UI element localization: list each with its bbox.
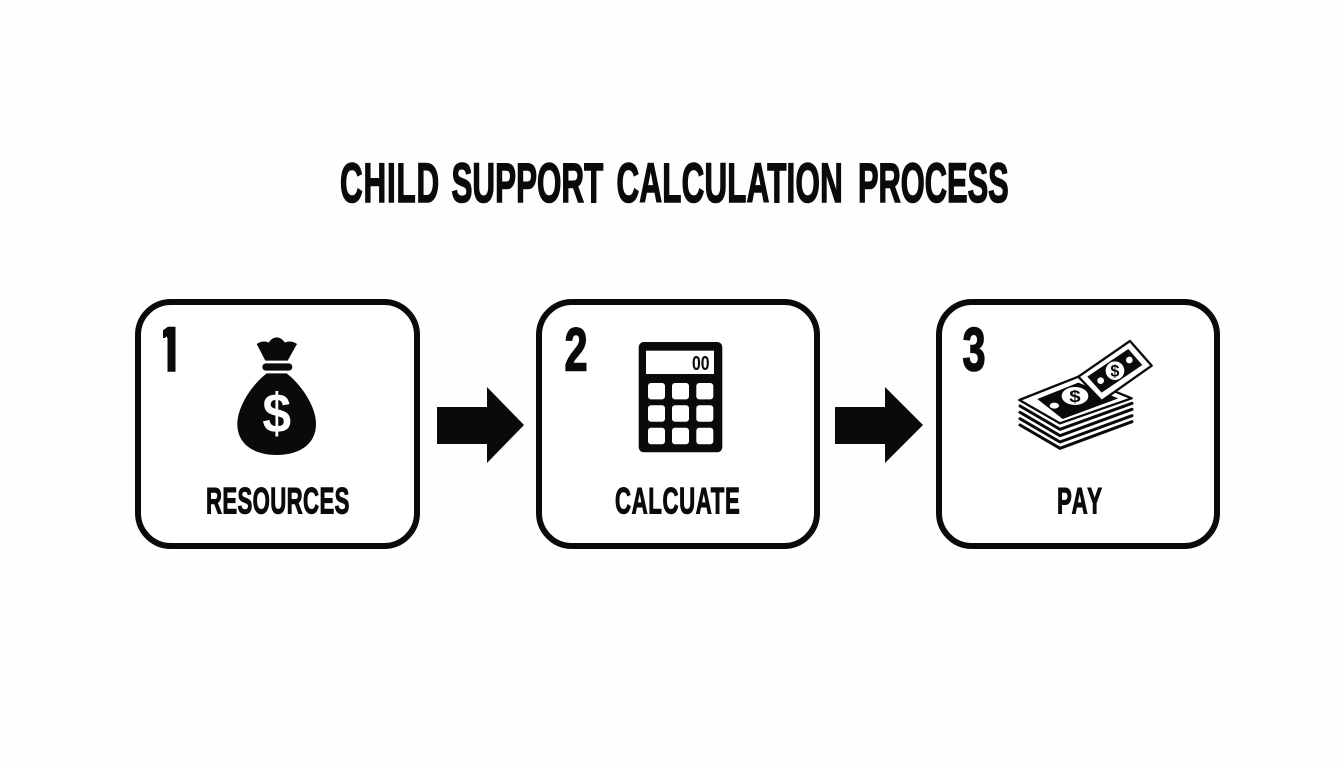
- title: [340, 151, 1009, 215]
- label: resources: RESOURCES: [206, 481, 349, 522]
- panel 1 border: [138, 302, 417, 546]
- step number 3: 3: [962, 317, 986, 385]
- step number 1: 1: [154, 314, 186, 385]
- icon: money bag: [237, 337, 316, 455]
- title: CALCULATION: [616, 152, 843, 215]
- icon: stack of cash: [1019, 341, 1152, 448]
- title: SUPPORT: [452, 152, 603, 215]
- panel: step 1 resources: [138, 302, 417, 546]
- panel: step 2 calculate: [539, 302, 817, 546]
- icon: stack of cash: $: [1069, 387, 1082, 406]
- icon: calculator: [639, 342, 722, 452]
- icon: calculator: 00: [692, 353, 710, 375]
- step number 2: 2: [564, 317, 588, 385]
- panel: step 3 pay: [939, 302, 1217, 546]
- panel 2 border: [539, 302, 817, 546]
- arrow: step 1 to step 2: [437, 387, 524, 463]
- panel 3 border: [939, 302, 1217, 546]
- title: CHILD: [340, 152, 439, 215]
- arrow: step 2 to step 3: [835, 387, 923, 463]
- icon: stack of cash: $: [1110, 362, 1120, 381]
- label: calculate: CALCUATE: [615, 481, 740, 522]
- label: pay: PAY: [1057, 481, 1102, 522]
- icon: money bag: $: [262, 382, 291, 445]
- title: PROCESS: [858, 151, 1009, 215]
